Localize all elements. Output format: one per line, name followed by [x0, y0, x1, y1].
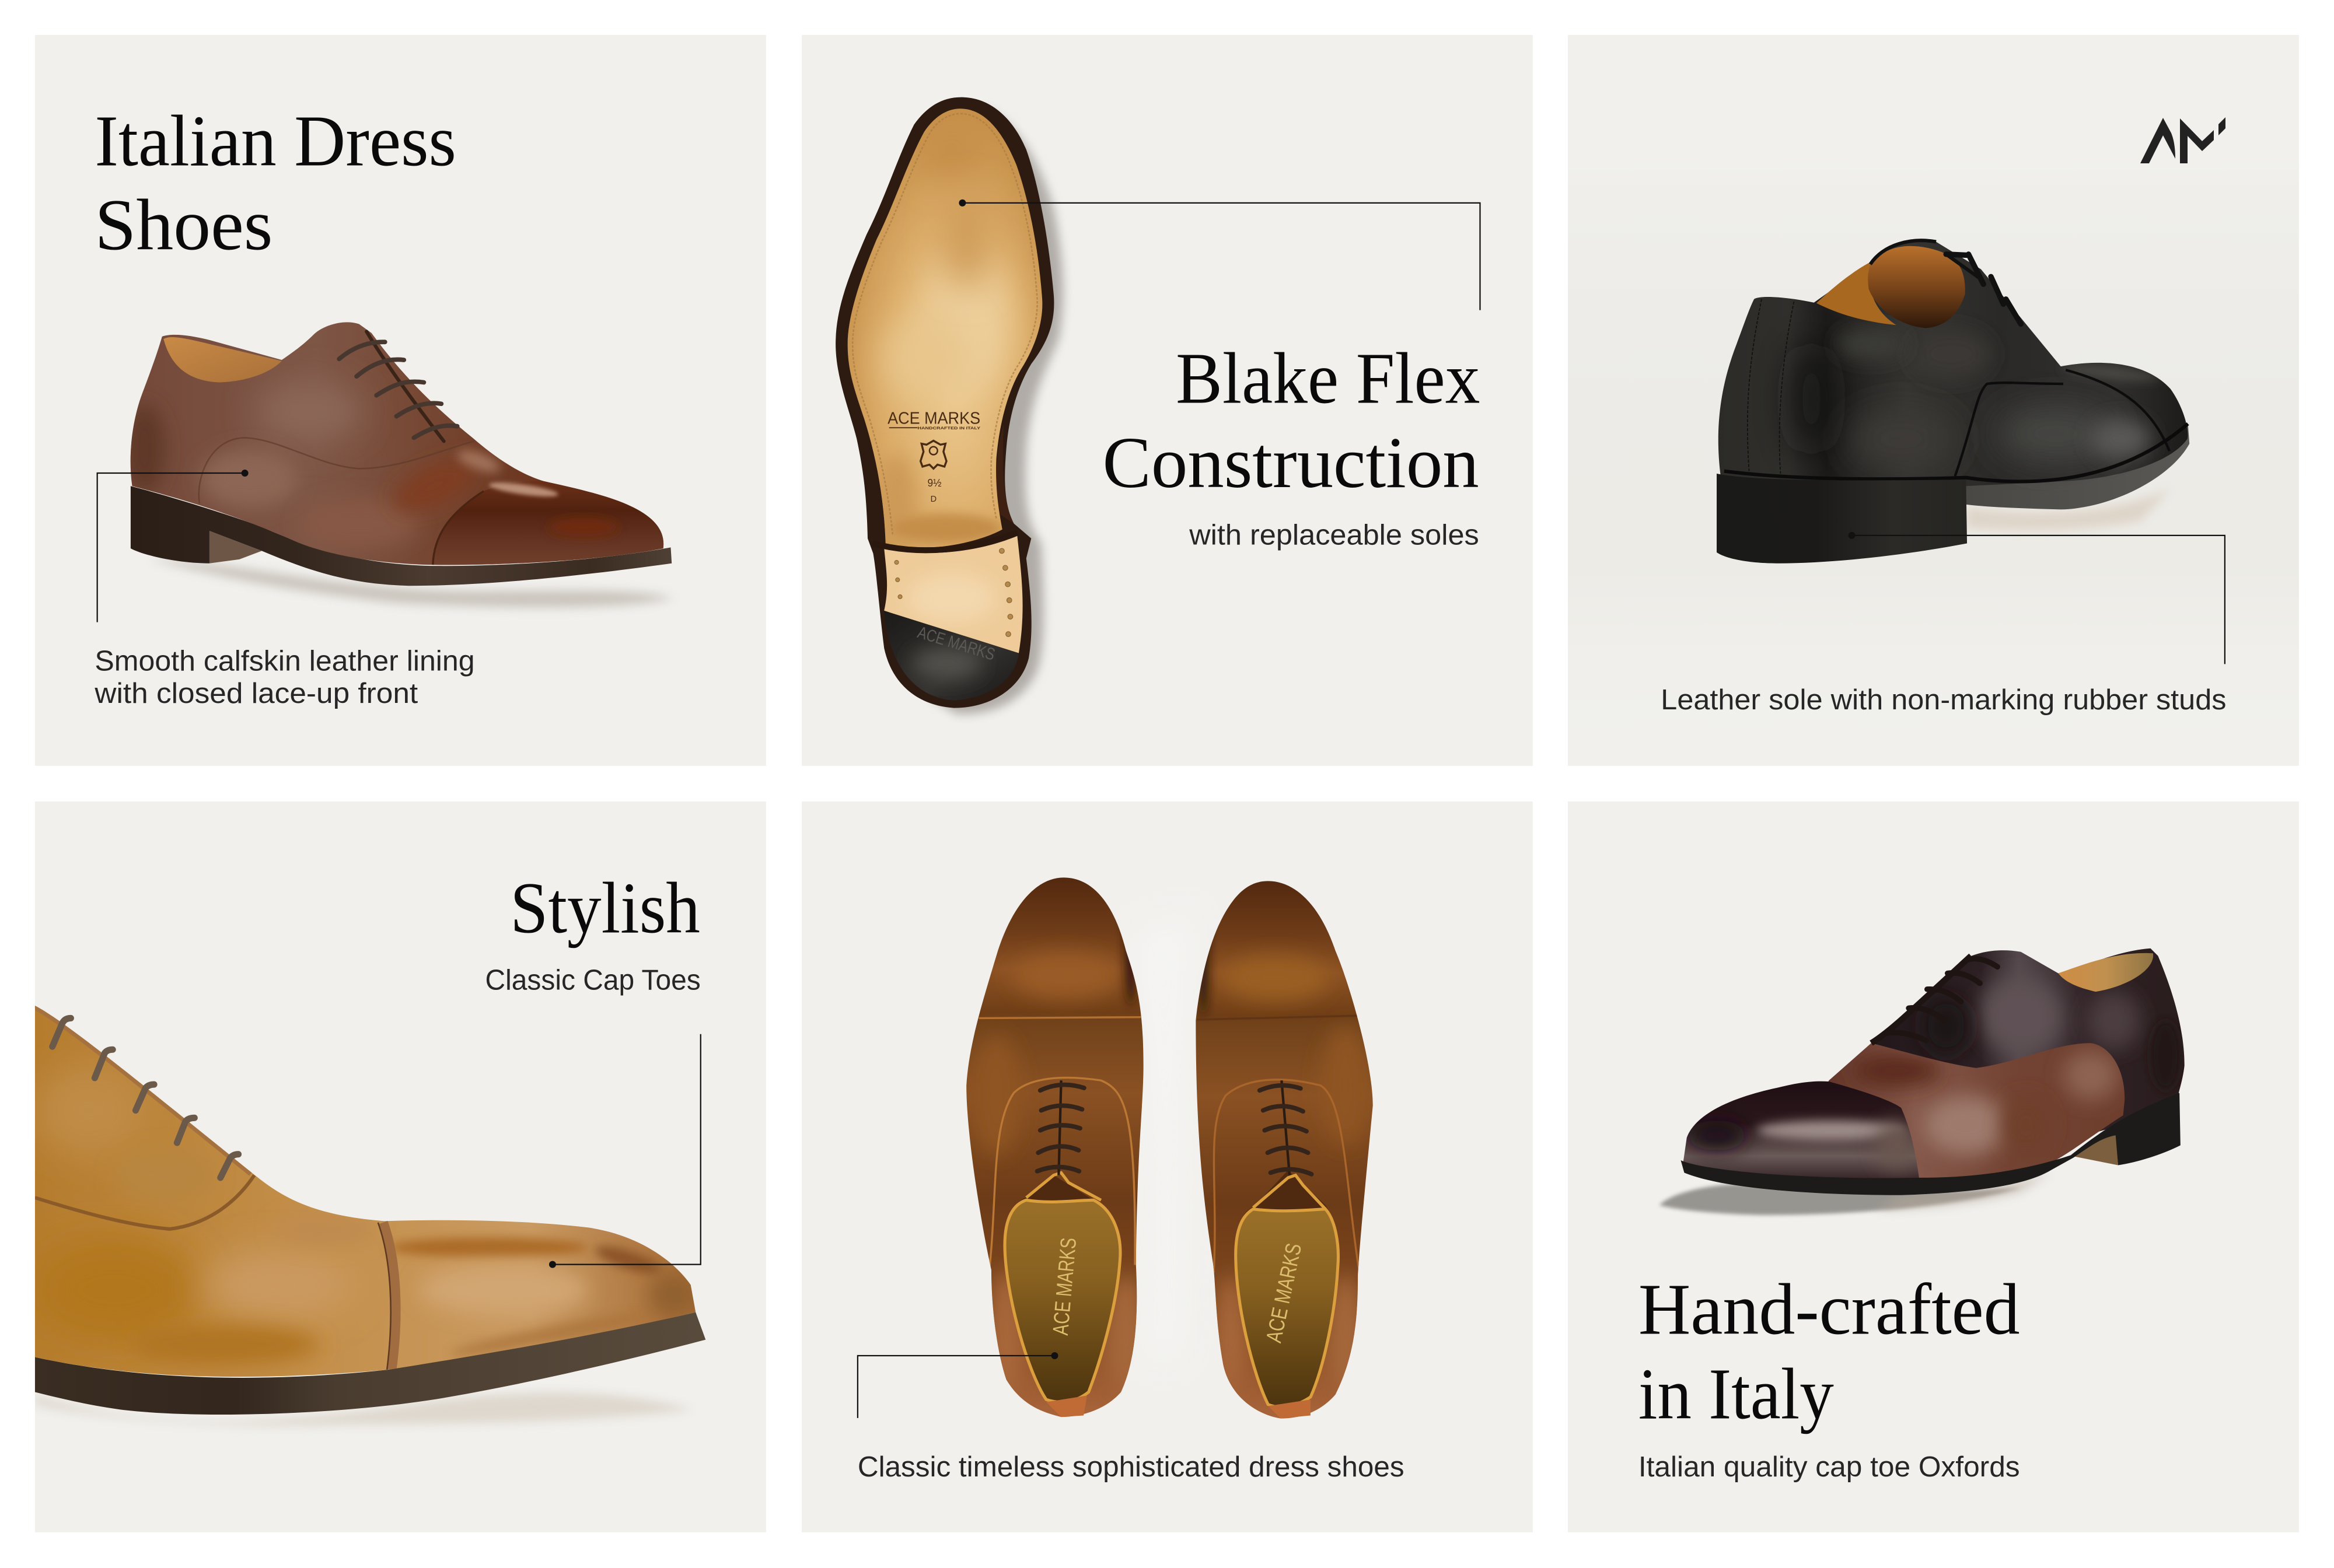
left shoe: ACE MARKS [1048, 1237, 1081, 1336]
photo: pair of tan oxfords, top view [966, 877, 1373, 1419]
panel: Hand-crafted in Italy [1568, 802, 2299, 1532]
caption: Leather sole with non-marking rubber studs [1661, 683, 2226, 716]
heel section [884, 536, 1023, 653]
title [95, 101, 456, 265]
sole stamp: 9½ [928, 477, 942, 489]
callout line [549, 1034, 701, 1268]
lining [163, 337, 282, 383]
caption: Classic Cap Toes [485, 964, 701, 996]
right shoe [1196, 881, 1373, 1419]
caption: with replaceable soles [1189, 518, 1479, 551]
photo: black cap-toe oxford, rear view [1717, 240, 2189, 564]
laces [1886, 959, 1997, 1041]
title [1103, 338, 1480, 503]
caption [94, 644, 475, 709]
panel: Stylish [30, 802, 766, 1532]
panel: Blake Flex Construction [802, 35, 1533, 766]
panel: leather sole with studs [1568, 35, 2299, 766]
sole stamp: ACE MARKS [888, 409, 980, 428]
sole stamp: D [931, 495, 937, 504]
photo: leather sole of shoe: ACE MARKS [916, 623, 997, 664]
lining [2058, 953, 2153, 992]
sole stamp [888, 409, 981, 504]
icon: AM logo [2140, 117, 2225, 163]
title [1638, 1269, 2020, 1434]
callout line [858, 1352, 1058, 1418]
right shoe: ACE MARKS [1261, 1241, 1306, 1345]
callout line [959, 200, 1480, 310]
callout line [1849, 532, 2225, 664]
left shoe [966, 877, 1146, 1417]
title: Hand-crafted [1638, 1269, 2020, 1349]
caption: Italian quality cap toe Oxfords [1638, 1450, 2020, 1483]
photo: leather sole of shoe [836, 97, 1063, 714]
caption: Smooth calfskin leather lining [95, 644, 475, 677]
title: in Italy [1638, 1354, 1834, 1434]
lining [1816, 262, 1896, 325]
title: Shoes [95, 184, 272, 265]
sole [1680, 1093, 2181, 1195]
photo: two-tone cap-toe oxford [1659, 949, 2185, 1215]
photo: tan cap toe close-up [30, 1006, 705, 1426]
caption: Classic timeless sophisticated dress shoes [858, 1450, 1404, 1483]
title: Blake Flex [1176, 338, 1480, 419]
title: Stylish [510, 867, 700, 948]
heel block [1717, 474, 1967, 564]
photo: brown cap-toe oxford, side view [125, 322, 673, 607]
laces [339, 331, 457, 441]
title: Construction [1103, 422, 1479, 503]
panel: Classic timeless dress shoes [802, 802, 1533, 1532]
caption: with closed lace-up front [94, 677, 418, 709]
laces [53, 1018, 239, 1178]
callout line [97, 470, 249, 622]
panel: Italian Dress Shoes [35, 35, 766, 766]
laces [1946, 254, 2021, 324]
sole stamp: HANDCRAFTED IN ITALY [917, 426, 981, 430]
title: Italian Dress [95, 101, 456, 181]
